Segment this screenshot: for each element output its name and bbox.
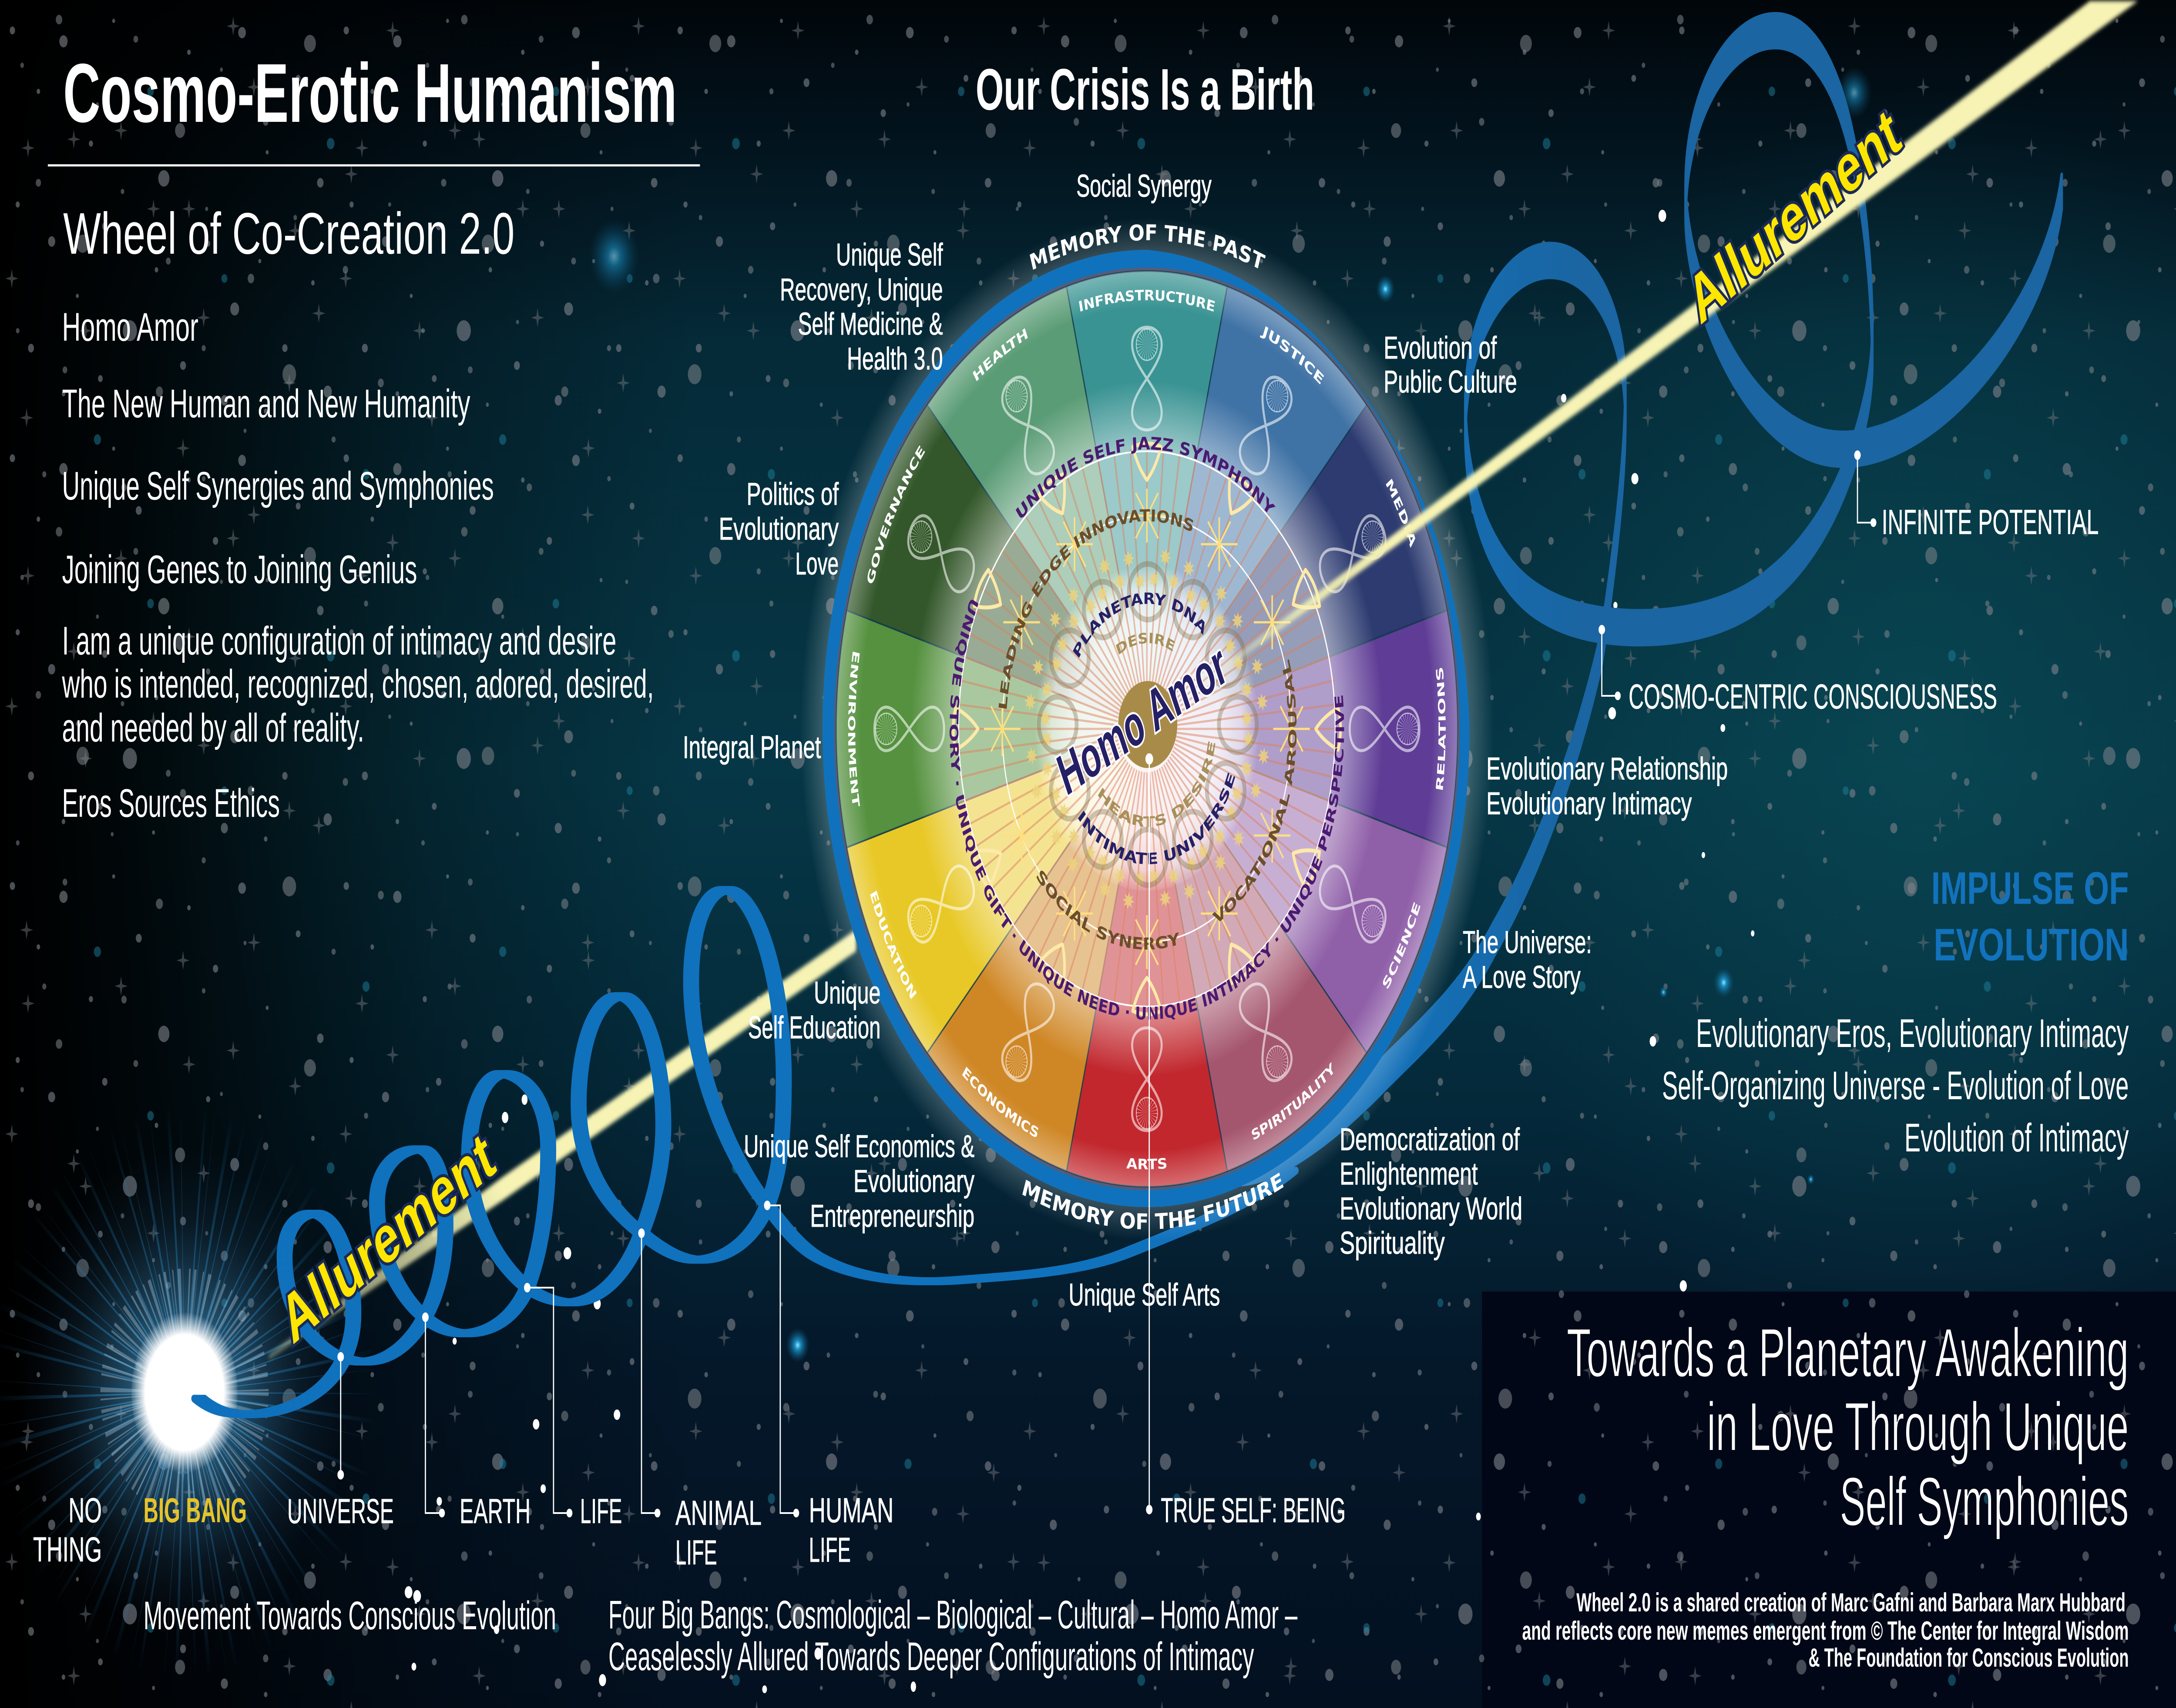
impulse text block: Evolutionary Eros, Evolutionary Intimacy [1696,1011,2129,1056]
sector labels: SCIENCE [1380,899,1423,993]
wheel callout labels: Spirituality [1340,1226,1445,1261]
sector labels: RELATIONS [1434,665,1448,792]
heading: impulse of evolution: IMPULSE OF [1931,863,2129,914]
left text block [62,305,654,825]
wheel callout labels: Recovery, Unique [780,272,943,307]
wheel callout labels: Evolution of [1384,331,1497,366]
sector labels: SPIRITUALITY [1249,1060,1337,1144]
wheel callout labels: Enlightenment [1340,1157,1478,1191]
left text block: Eros Sources Ethics [62,781,280,825]
wheel callout labels: Public Culture [1384,365,1517,399]
axis labels: consciousness: INFINITE POTENTIAL [1882,503,2099,542]
wheel callout labels: Unique Self [836,238,943,272]
impulse text block: Evolution of Intimacy [1904,1115,2129,1160]
timeline labels: LIFE [809,1531,851,1570]
connector lines [337,450,1876,1517]
bottom captions: Four Big Bangs: Cosmological – Biological – Cultural – Homo Amor – [608,1592,1297,1637]
wheel of co-creation [834,220,1460,1235]
timeline labels: UNIVERSE [287,1492,394,1531]
wheel callout labels: Integral Planet [683,730,821,765]
heading: impulse of evolution [1931,863,2129,970]
ring labels: HEARTS DESIRE [1095,738,1218,831]
sector labels: ENVIRONMENT [846,649,862,809]
axis labels: consciousness: COSMO-CENTRIC CONSCIOUSNESS [1629,678,1997,716]
heading: impulse of evolution: EVOLUTION [1934,919,2129,970]
sector labels: JUSTICE [1259,322,1326,388]
wheel callout labels: Evolutionary Relationship [1486,752,1728,786]
credits: & The Foundation for Conscious Evolution [1808,1643,2129,1672]
wheel callout labels: Self Education [748,1010,880,1045]
ring labels: LEADING EDGE INNOVATIONS [996,506,1196,711]
left text block: Joining Genes to Joining Genius [62,547,417,592]
left text block: The New Human and New Humanity [62,381,470,426]
bottom captions: Ceaselessly Allured Towards Deeper Configurations of Intimacy [608,1634,1254,1679]
spiral ribbon: lower coils [194,890,1296,1414]
left text block: who is intended, recognized, chosen, adored, desired, [62,661,654,706]
gold star rings [984,489,1310,969]
upper allurement beam [1195,1,2138,691]
ring labels: MEMORY OF THE PAST [1027,220,1267,276]
sector labels: ECONOMICS [960,1064,1041,1142]
wheel callout labels: Entrepreneurship [810,1199,974,1234]
ring labels: UNIQUE STORY · UNIQUE GIFT · UNIQUE NEED · UNIQUE INTIMACY · UNIQUE PERSPECTIVE [947,594,1347,1024]
left text block: I am a unique configuration of intimacy and desire [62,618,616,663]
radial rays [957,448,1337,1010]
timeline labels: BIG BANG [144,1491,247,1530]
timeline labels [33,1491,1346,1572]
interlaced loop ring [1039,564,1257,885]
ring labels: INTIMATE UNIVERSE [1075,769,1238,869]
wheel outer glow [800,218,1494,1240]
wheel callout labels: Evolutionary Intimacy [1486,786,1692,821]
homo amor label: Homo Amor [1051,631,1234,808]
credits [1522,1588,2129,1672]
subtitle: Wheel of Co-Creation 2.0 [63,201,514,266]
wheel callout labels: Evolutionary World [1340,1191,1522,1226]
allurement label upper: Allurement [1679,94,1909,338]
timeline labels: LIFE [675,1534,717,1572]
ring labels: SOCIAL SYNERGY [1033,866,1181,954]
ring labels: MEMORY OF THE FUTURE [1019,1168,1286,1235]
lower allurement beam [269,930,856,1359]
timeline labels: LIFE [580,1492,622,1531]
allurement label lower: Allurement [272,1118,503,1358]
bottom captions: Movement Towards Conscious Evolution [144,1593,556,1638]
sector labels [846,287,1448,1173]
wheel callout labels: The Universe: [1463,925,1592,960]
timeline labels: NO [68,1491,102,1530]
heading: our crisis is a birth: Our Crisis Is a Birth [976,57,1314,122]
cream triangle markers [953,443,1340,1014]
wheel callout labels: Democratization of [1340,1122,1520,1157]
left text block: Unique Self Synergies and Symphonies [62,463,494,508]
ring labels: UNIQUE SELF JAZZ SYMPHONY [1013,433,1277,524]
wheel callout labels: Politics of [747,477,839,512]
sector labels: INFRASTRUCTURE [1077,287,1216,315]
left text block: and needed by all of reality. [62,705,364,750]
sector labels: GOVERNANCE [864,442,927,587]
timeline labels: THING [33,1530,102,1569]
title rule [48,164,700,166]
sector labels: ARTS [1126,1155,1168,1173]
sector labels: HEALTH [970,325,1030,385]
wheel callout labels: Love [795,547,839,581]
ring labels: PLANETARY DNA [1071,590,1209,662]
title: Cosmo-Erotic Humanism [63,46,677,140]
panel: dark closing-statement box [1482,1292,2176,1708]
axis labels: consciousness [1629,503,2099,716]
wheel callout labels: Self Medicine & [798,307,943,342]
icons: infinity wheels [874,327,1419,1131]
gold centre disc [1118,681,1177,768]
wheel callout labels: Unique Self Economics & [744,1129,974,1164]
sector labels: EDUCATION [867,888,919,1003]
wheel callout labels: Social Synergy [1076,169,1212,204]
credits: and reflects core new memes emergent from © The Center for Integral Wisdom [1522,1616,2129,1645]
timeline labels: EARTH [460,1492,531,1531]
blue ring around wheel [823,250,1470,1207]
sector labels: MEDIA [1383,476,1419,550]
wheel callout labels: Unique Self Arts [1069,1278,1220,1312]
bottom captions [144,1592,1297,1679]
timeline labels: ANIMAL [675,1494,762,1533]
wheel callout labels: Evolutionary [853,1164,974,1199]
credits: Wheel 2.0 is a shared creation of Marc Gafni and Barbara Marx Hubbard [1576,1588,2126,1617]
wheel callout labels [683,169,1728,1312]
ring labels: VOCATIONAL AROUSAL [1211,658,1300,928]
ring labels [947,220,1347,1235]
wheel callout labels: Unique [814,976,880,1010]
wheel callout labels: A Love Story [1463,960,1581,995]
wheel callout labels: Health 3.0 [847,342,943,376]
big bang burst [19,1149,350,1636]
timeline labels: TRUE SELF: BEING [1161,1491,1346,1530]
impulse text block [1662,1011,2129,1160]
wheel callout labels: Evolutionary [719,512,839,547]
spiral ribbon: upper loops [1240,14,2062,1185]
ring labels: DESIRE [1114,630,1177,658]
left text block: Homo Amor [62,305,198,349]
wheel sectors [836,271,1457,1187]
closing statement [1567,1314,2129,1540]
timeline labels: HUMAN [809,1491,893,1530]
